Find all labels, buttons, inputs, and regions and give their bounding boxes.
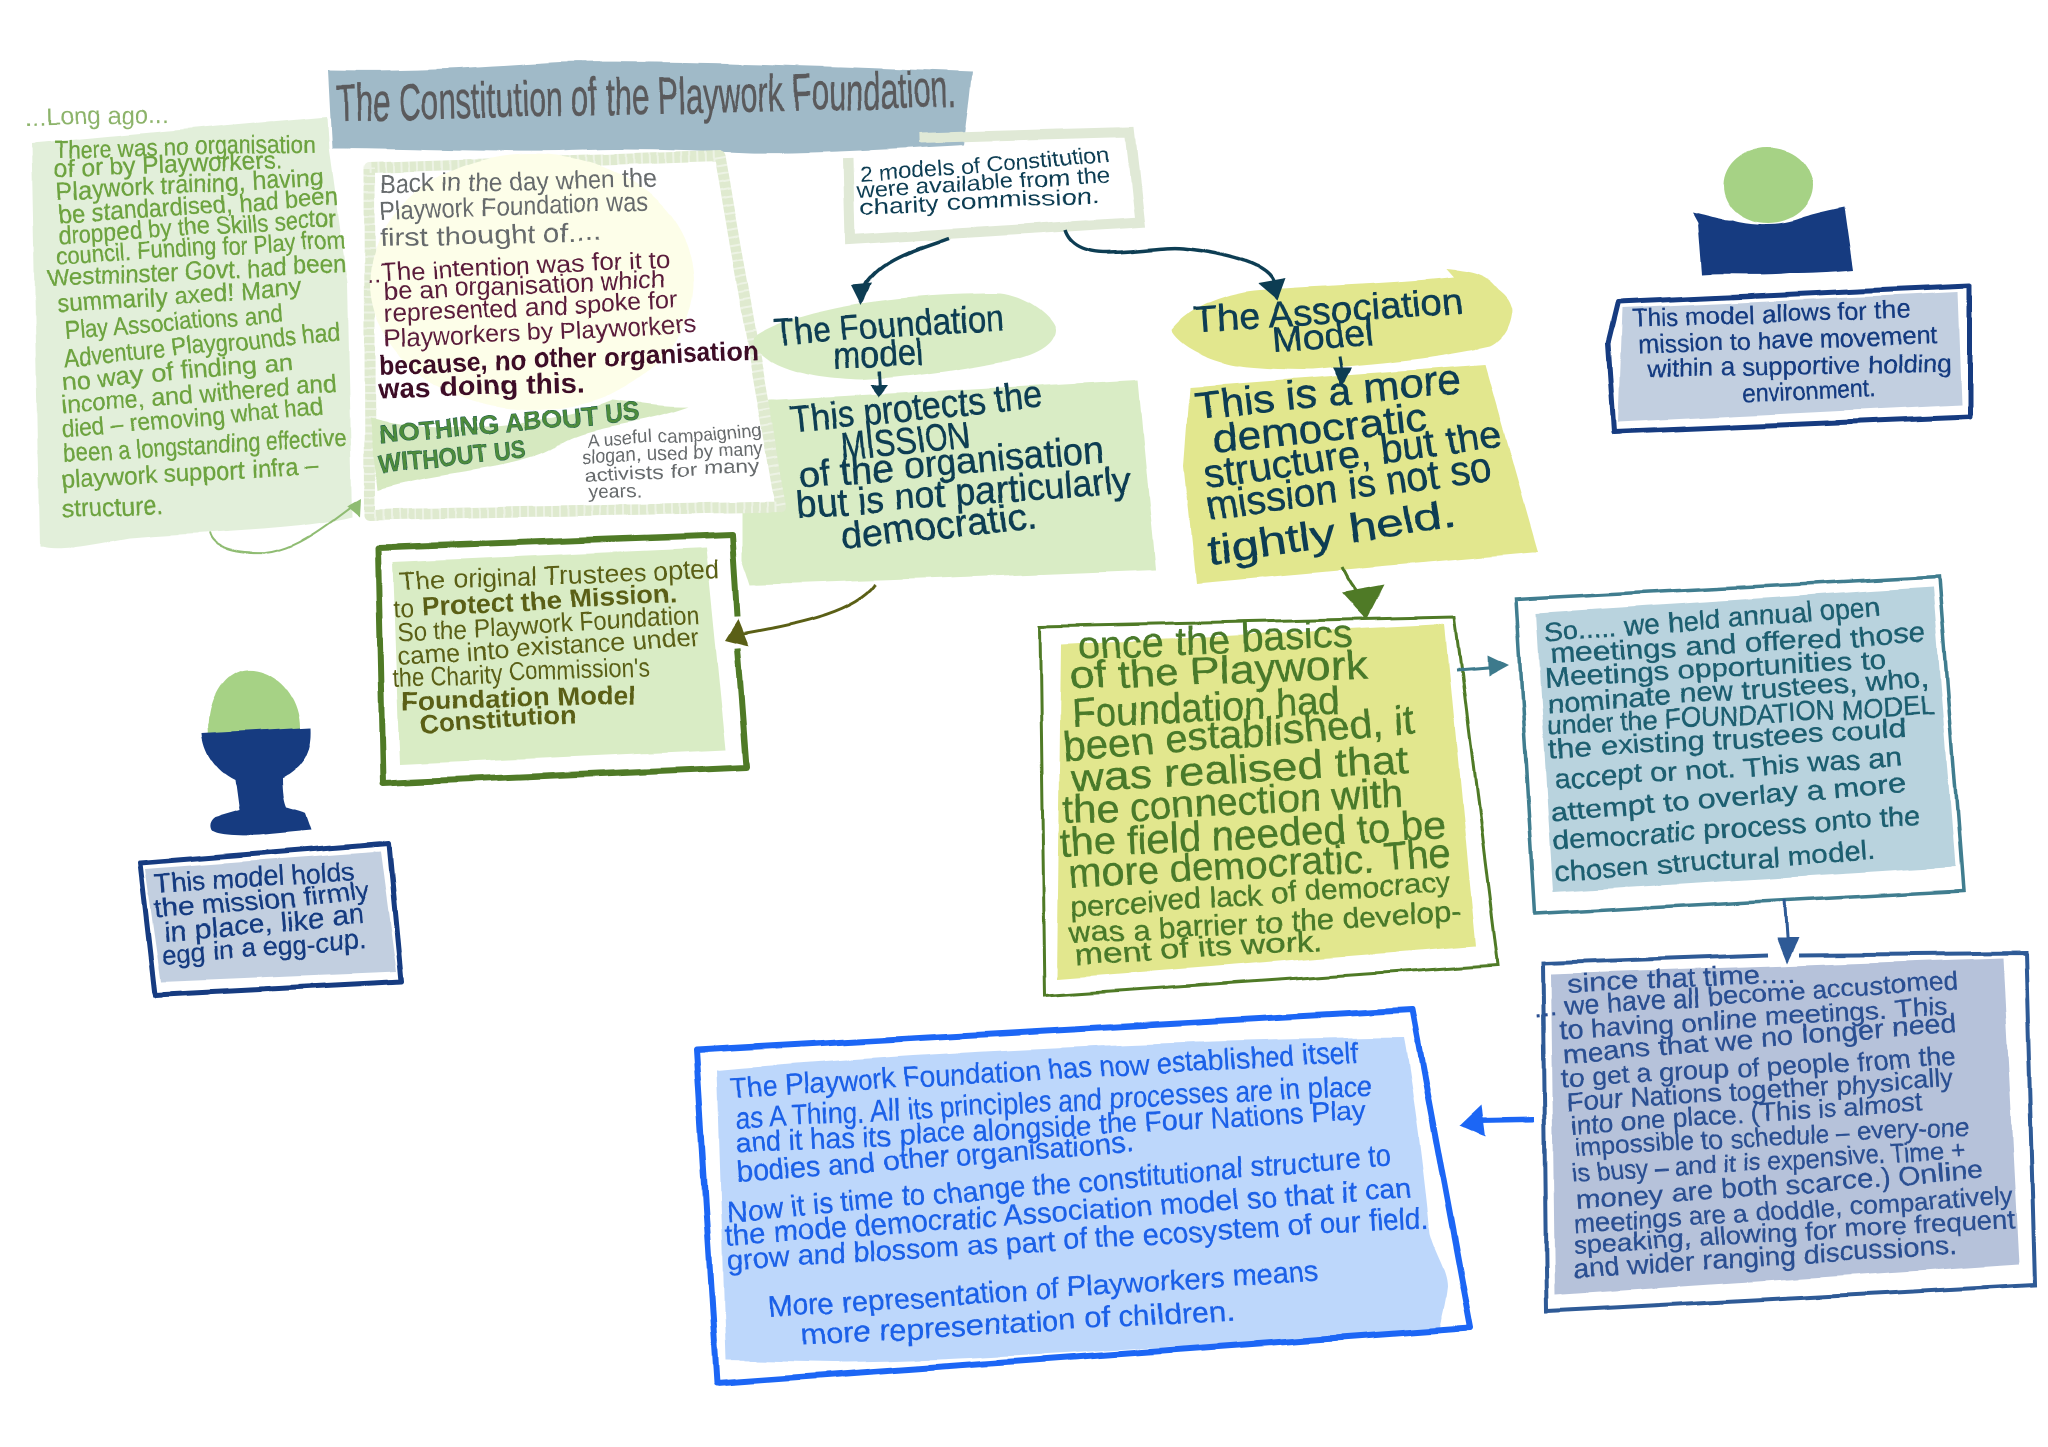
emphasised text: was doing this. xyxy=(376,368,585,404)
annual meetings text: So..... we held annual open xyxy=(1543,591,1882,648)
final panel text: grow and blossom as part of the ecosystem of our field. xyxy=(726,1202,1430,1277)
egg cup caption text: in place, like an xyxy=(163,899,365,948)
annual meetings text: democratic process onto the xyxy=(1551,800,1922,856)
egg cup caption frame xyxy=(140,843,402,995)
association model heading: The Association xyxy=(1192,280,1465,341)
trustees text: The original Trustees opted xyxy=(399,554,720,596)
association description text xyxy=(1192,357,1504,574)
icon: egg in egg cup xyxy=(203,670,312,835)
final panel fill xyxy=(717,1037,1448,1362)
online meetings text: ... we have all become accustomed xyxy=(1533,965,1959,1023)
intention text: be an organisation which xyxy=(383,265,666,306)
association description text: mission is not so xyxy=(1203,445,1493,529)
online meetings text: speaking, allowing for more frequent xyxy=(1573,1204,2016,1260)
pale yellow blob xyxy=(370,154,694,410)
arrow: association to once the basics xyxy=(1342,567,1385,620)
panel: holding environment caption xyxy=(1608,286,1970,432)
arrow: once the basics to annual meetings xyxy=(1456,655,1509,676)
back in the day frame xyxy=(369,156,781,515)
emphasised text: because, no other organisation xyxy=(378,336,758,381)
annual meetings text: Meetings opportunities to xyxy=(1544,644,1887,693)
foundation description text xyxy=(788,374,1133,557)
two models frame xyxy=(848,132,1140,240)
association description text: structure, but the xyxy=(1202,412,1504,497)
annual meetings fill xyxy=(1536,587,1955,892)
online meetings frame xyxy=(1543,953,2035,1311)
online meetings text xyxy=(1533,957,2016,1284)
panel: original trustees xyxy=(378,535,747,783)
intention text: ..The intention was for it to xyxy=(366,245,671,288)
online meetings text: into one place. (This is almost xyxy=(1570,1087,1923,1140)
online meetings text: and wider ranging discussions. xyxy=(1572,1230,1957,1284)
annual meetings text: nominate new trustees, who, xyxy=(1545,663,1930,719)
title text: The Constitution of the Playwork Foundation. xyxy=(336,61,957,133)
long ago text: Westminster Govt. had been xyxy=(47,250,346,293)
once the basics small text: was a barrier to the develop- xyxy=(1068,897,1462,950)
emphasised text xyxy=(376,336,758,404)
final panel text: as A Thing. All its principles and processes are in place xyxy=(735,1070,1371,1135)
arrow: to foundation model xyxy=(852,238,949,305)
two models text xyxy=(855,142,1111,220)
title banner xyxy=(328,61,972,153)
long ago text: died – removing what had xyxy=(60,393,325,444)
panel: association model description xyxy=(1184,357,1538,583)
panel: online meetings xyxy=(1533,953,2035,1311)
annual meetings text: the existing trustees could xyxy=(1548,713,1907,765)
back in the day text: Playwork Foundation was xyxy=(379,186,648,226)
trustees text: came into existance under xyxy=(396,621,700,671)
association description text: This is a more xyxy=(1192,357,1462,429)
arrow: to association model xyxy=(1065,230,1286,300)
trustees fill xyxy=(393,548,726,765)
trustees text: So the Playwork Foundation xyxy=(396,599,701,648)
slogan note: years. xyxy=(587,481,643,503)
once the basics text: the connection with xyxy=(1062,772,1404,833)
long ago text: council. Funding for Play from xyxy=(56,226,346,270)
panel: egg cup caption xyxy=(140,843,402,995)
trustees text: to xyxy=(393,593,414,624)
panel: back in the day xyxy=(366,154,781,515)
final panel text xyxy=(724,1037,1430,1352)
foundation model heading: The Foundation xyxy=(773,297,1005,353)
holding caption fill xyxy=(1618,292,1962,422)
long ago text: be standardised, had been xyxy=(58,183,339,229)
long ago text: There was no organisation xyxy=(54,130,316,164)
intention text xyxy=(366,245,697,353)
panel: once the basics xyxy=(1040,612,1498,996)
once the basics text xyxy=(1059,612,1452,897)
association model heading xyxy=(1171,268,1513,370)
panel: annual meetings xyxy=(1516,577,1963,914)
foundation description background xyxy=(742,380,1156,585)
back in the day text: first thought of.... xyxy=(379,216,602,253)
final panel text: the mode democratic Association model so that it can xyxy=(724,1172,1413,1252)
online meetings text: means that we no longer need xyxy=(1561,1008,1958,1069)
online meetings fill xyxy=(1551,958,2019,1295)
panel: playwork foundation now xyxy=(696,1010,1471,1383)
holding caption text xyxy=(1631,295,1952,408)
foundation description text: of the organisation xyxy=(798,429,1106,497)
slogan note: slogan, used by many xyxy=(581,439,765,468)
foundation model heading xyxy=(752,293,1056,380)
slogan note xyxy=(581,421,765,503)
online meetings text: money are both scarce.) Online xyxy=(1574,1154,1984,1215)
slogan note: activists for many xyxy=(583,456,761,487)
callout: two models xyxy=(848,132,1140,240)
long ago text: been a longstanding effective xyxy=(63,423,347,468)
online meetings text: Four Nations together physically xyxy=(1565,1063,1954,1117)
once the basics text: been established, it xyxy=(1061,698,1417,770)
final panel text: and it has its place alongside the Four Nations Play xyxy=(735,1095,1367,1160)
once the basics text: was realised that xyxy=(1069,738,1411,801)
once the basics small text: perceived lack of democracy xyxy=(1070,866,1452,924)
arrow: association heading to description xyxy=(1332,357,1352,387)
annual meetings text: under the FOUNDATION MODEL xyxy=(1547,690,1935,741)
online meetings text: to get a group of people from the xyxy=(1560,1041,1957,1093)
final panel text: Now it is time to change the constitutional structure to xyxy=(726,1140,1392,1229)
two models text: charity commission. xyxy=(859,183,1100,220)
annual meetings text: attempt to overlay a more xyxy=(1549,768,1906,827)
long ago text xyxy=(47,130,347,524)
long ago text: of or by Playworkers. xyxy=(53,146,283,183)
trustees text: the Charity Commission's xyxy=(392,651,650,693)
once the basics small text: ment of its work. xyxy=(1074,925,1324,972)
trustees text: Protect the Mission. xyxy=(421,578,678,622)
egg cup caption text xyxy=(153,856,371,971)
long ago text: summarily axed! Many xyxy=(55,273,302,319)
annual meetings text: chosen structural model. xyxy=(1553,835,1877,887)
back in the day text xyxy=(379,163,656,253)
holding caption text: within a supportive holding xyxy=(1646,350,1952,383)
once the basics text: more democratic. The xyxy=(1068,832,1452,897)
egg cup caption fill xyxy=(145,851,397,982)
online meetings text: impossible to schedule – every-one xyxy=(1575,1111,1970,1162)
long ago text: dropped by the Skills sector xyxy=(58,205,337,249)
once the basics frame xyxy=(1040,617,1498,996)
long ago text: Playwork training, having xyxy=(56,163,324,206)
panel: foundation model description xyxy=(742,380,1156,585)
trustees text xyxy=(392,554,720,739)
long ago text: no way of finding an xyxy=(60,348,294,396)
holding caption text: This model allows for the xyxy=(1631,295,1910,333)
egg cup caption text: This model holds xyxy=(153,856,356,899)
arrow: annual meetings to online meetings xyxy=(1777,900,1799,963)
annual meetings text: accept or not. This was an xyxy=(1553,742,1903,794)
trustees text: Foundation Model xyxy=(401,679,636,716)
long ago text: playwork support infra – xyxy=(61,451,320,494)
association description text: democratic xyxy=(1210,395,1430,462)
final panel text: The Playwork Foundation has now established itself xyxy=(730,1037,1360,1105)
annual meetings frame xyxy=(1516,577,1963,914)
intention text: Playworkers by Playworkers xyxy=(383,311,697,353)
icon: egg in holding environment xyxy=(1692,147,1853,275)
online meetings text: since that time.... xyxy=(1567,957,1795,999)
trustees text: Constitution xyxy=(418,699,577,739)
back in the day text: Back in the day when the xyxy=(379,163,656,199)
long ago text: Adventure Playgrounds had xyxy=(62,318,341,373)
slogan: WITHOUT US xyxy=(378,434,528,479)
final panel text: More representation of Playworkers means xyxy=(767,1255,1320,1324)
panel: long ago xyxy=(26,102,352,548)
arrow: long ago to back in the day xyxy=(209,498,361,553)
slogan note: A useful campaigning xyxy=(586,421,763,452)
arrow: foundation description to trustees xyxy=(725,585,875,646)
online meetings text: to having online meetings. This xyxy=(1559,991,1949,1045)
once the basics text: the field needed to be xyxy=(1059,803,1447,866)
long ago text: structure. xyxy=(61,491,163,524)
annual meetings text: meetings and offered those xyxy=(1550,618,1927,669)
holding caption frame xyxy=(1608,286,1970,432)
foundation description text: but is not particularly xyxy=(795,459,1133,527)
intention text: represented and spoke for xyxy=(383,286,679,328)
once the basics small text xyxy=(1068,866,1462,972)
once the basics text: of the Playwork xyxy=(1069,643,1369,699)
foundation description text: This protects the xyxy=(788,374,1044,442)
long ago text: income, and withered and xyxy=(60,370,338,419)
slogan xyxy=(378,396,642,479)
final panel text: bodies and other organisations. xyxy=(735,1127,1134,1189)
foundation description text: MISSION xyxy=(839,414,972,469)
slogan: NOTHING ABOUT US xyxy=(378,396,642,449)
once the basics fill xyxy=(1057,624,1476,979)
holding caption text: mission to have movement xyxy=(1637,321,1937,359)
online meetings text: is busy – and it is expensive. Time + xyxy=(1571,1134,1967,1188)
egg cup caption text: the mission firmly xyxy=(153,876,371,924)
online meetings text: meetings are a doddle, comparatively xyxy=(1572,1180,2013,1239)
holding caption text: environment. xyxy=(1741,375,1877,408)
annual meetings text xyxy=(1543,591,1935,887)
green swoosh xyxy=(370,400,689,490)
arrow: foundation heading to description xyxy=(870,372,888,397)
final panel frame xyxy=(696,1010,1471,1383)
two models text: 2 models of Constitution xyxy=(858,142,1111,187)
final panel text: more representation of children. xyxy=(800,1295,1236,1352)
association description text: tightly held. xyxy=(1204,492,1458,574)
egg cup caption text: egg in a egg-cup. xyxy=(161,924,367,971)
two models text: were available from the xyxy=(855,162,1111,203)
once the basics text: once the basics xyxy=(1077,612,1354,668)
long ago text: Play Associations and xyxy=(63,300,284,345)
trustees frame xyxy=(378,535,747,783)
long ago heading: ...Long ago... xyxy=(26,102,169,131)
association model heading: Model xyxy=(1270,312,1375,361)
once the basics text: Foundation had xyxy=(1070,679,1341,737)
foundation model heading: model xyxy=(832,332,923,378)
arrow: online meetings to playwork foundation now xyxy=(1460,1105,1535,1136)
foundation description text: democratic. xyxy=(839,495,1039,557)
long ago background xyxy=(32,116,352,548)
